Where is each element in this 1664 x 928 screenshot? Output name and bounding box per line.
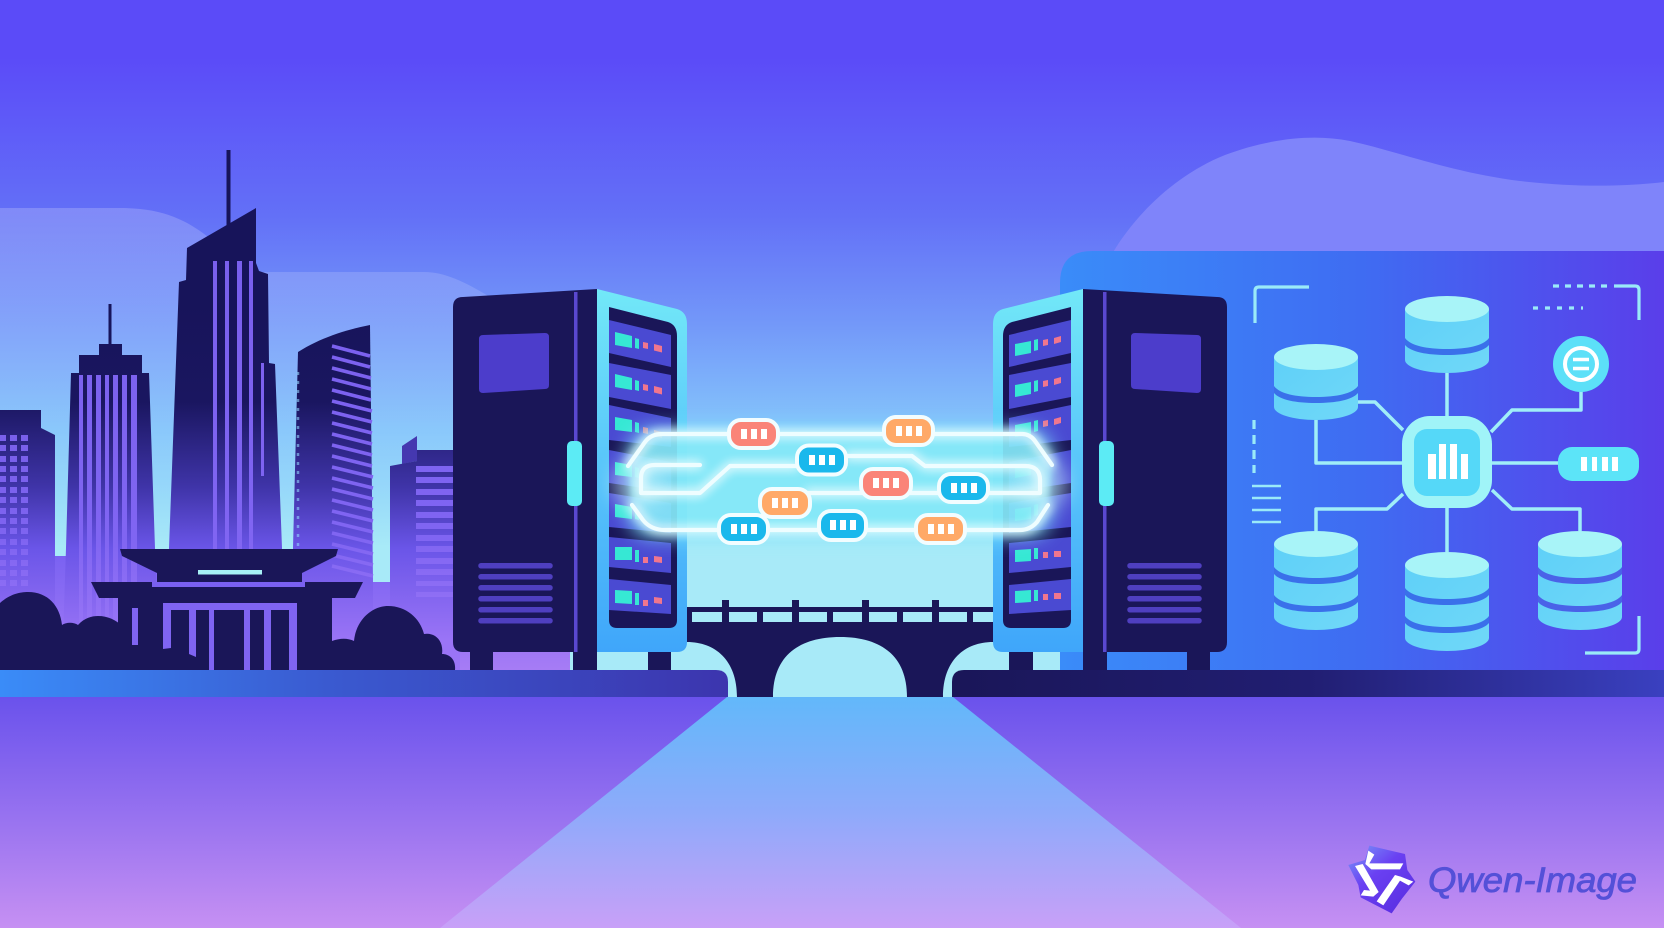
packet blue [939,474,988,502]
purple city backdrop [0,556,570,670]
data packets [719,417,988,543]
right data panel [1060,251,1664,670]
central hub with bar chart [1402,416,1492,508]
menu circle icon [1553,336,1609,392]
rack inner bay [1003,307,1071,628]
trees left [0,592,122,670]
rack server units [1009,320,1071,614]
packet red [861,469,911,498]
database left top [1274,344,1358,420]
packet orange [760,489,810,517]
packet blue [819,511,866,540]
rack vents [478,563,553,624]
building: curved tower [293,325,373,670]
packet orange [916,515,965,543]
packet blue [719,515,768,543]
logo: Qwen-Image [1348,846,1637,913]
network glow field [610,428,1070,538]
palace light bar [198,570,262,574]
database bottom right [1538,531,1622,630]
rack side face [597,289,687,652]
building: right low block [390,436,460,670]
rack seam [574,292,578,652]
packet red [729,420,778,448]
rack server units [609,320,671,614]
database top center [1405,296,1489,373]
rack side face [993,289,1083,652]
status pill [1558,447,1639,481]
palace columns [132,603,297,670]
rack teal LEDs [1015,339,1038,603]
rack seam [1103,292,1106,652]
lower plane [0,697,1664,928]
rack handle [567,441,582,506]
palace lower roof [91,582,363,670]
palace landmark [91,549,363,670]
building: central skyscraper [169,150,282,670]
building: far left [0,410,55,670]
central road [440,697,1241,928]
server rack left [453,289,687,670]
ground band right [952,670,1664,697]
logo wordmark: Qwen-Image [1428,861,1637,900]
rack front body [1083,289,1227,652]
rack pink LEDs [1043,336,1061,600]
packet orange [884,417,933,445]
rack window [1131,333,1201,393]
right background wave [1112,138,1664,300]
connector lines [1316,373,1581,552]
database network diagram [1252,286,1639,653]
server rack right [993,289,1227,670]
network connection lines [628,434,1052,530]
logo icon [1348,846,1415,913]
rack handle [1099,441,1114,506]
database bottom left [1274,531,1358,630]
database bottom center [1405,552,1489,651]
bridge railing [687,600,993,624]
sky background [0,0,1664,720]
rack pink LEDs [643,342,662,606]
rack front body [453,289,597,652]
rack teal LEDs [615,332,639,605]
building: left tower [62,304,160,670]
rack feet [1009,650,1210,670]
rack vents [1127,563,1202,624]
corner frames and dashes [1252,286,1639,653]
bridge arches [687,622,993,697]
palace upper roof [120,549,338,583]
rack inner bay [609,307,677,628]
bridge [687,600,993,697]
rack feet [470,650,671,670]
left background clouds [0,208,490,600]
packet blue [797,446,846,474]
rack window [479,333,549,393]
trees right [332,606,455,670]
ground band left [0,670,728,697]
